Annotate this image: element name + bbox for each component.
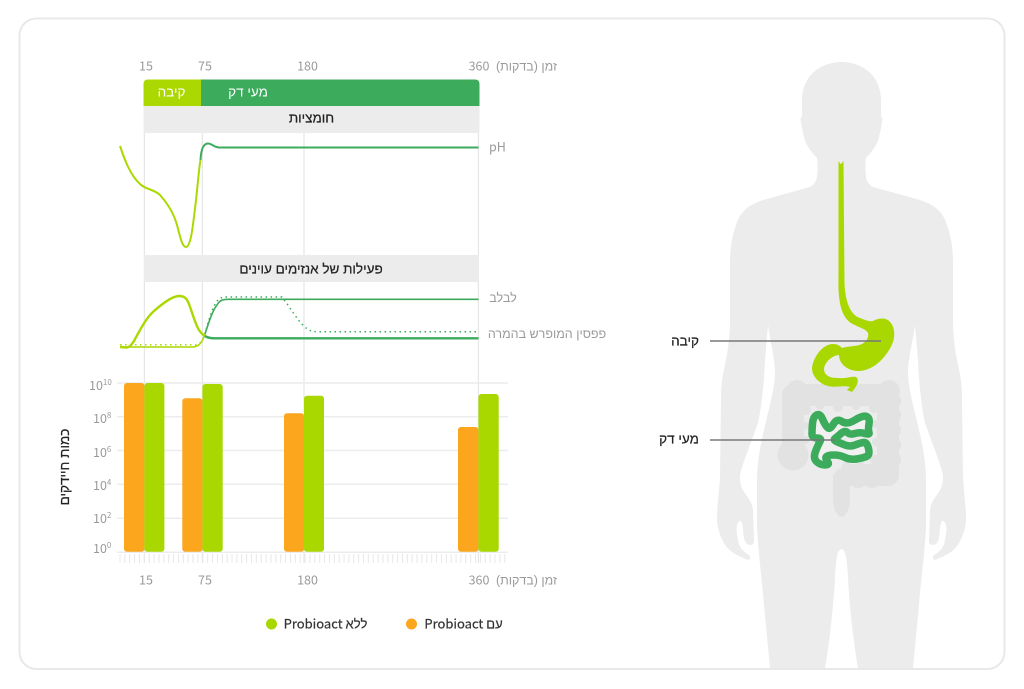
bottom time axis: 180	[297, 570, 318, 588]
callout: small intestine: מעי דק	[659, 432, 699, 446]
bottom time axis: 360	[469, 570, 489, 588]
heading: acidity: חומציות	[289, 110, 334, 126]
callout: stomach: קיבה	[671, 334, 699, 348]
bottom time axis: 75	[198, 570, 212, 588]
stage: small intestine	[201, 80, 480, 106]
top time axis: 360	[469, 56, 489, 74]
y axis labels: 10	[93, 538, 107, 557]
legend	[266, 614, 503, 632]
legend: without Probioact: ללא Probioact	[284, 614, 367, 632]
bottom time axis: 15	[139, 570, 153, 588]
stage: small intestine: מעי דק	[228, 84, 268, 100]
heading: enzyme activity: פעילות של אנזימים עוינים	[239, 262, 383, 276]
y axis labels: 2	[107, 510, 112, 521]
stage header	[144, 80, 480, 106]
pH line chart	[120, 136, 506, 247]
bottom time axis: זמן (בדקות)	[496, 574, 557, 588]
y axis labels: 10	[93, 442, 107, 461]
large intestine	[778, 380, 901, 517]
y axis title: כמות חיידקים	[57, 429, 72, 505]
y axis labels: 4	[107, 477, 112, 488]
x ticks	[120, 554, 508, 563]
top time axis: 180	[297, 56, 318, 74]
y axis labels: 8	[107, 410, 112, 421]
body illustration	[717, 62, 966, 668]
label: pancreas: לבלב	[489, 291, 517, 305]
bar chart	[57, 375, 508, 558]
bars: 15 min	[124, 383, 164, 552]
y axis labels	[89, 375, 112, 557]
y axis labels: 10	[93, 408, 107, 427]
small intestine	[812, 414, 869, 465]
y axis labels: 10	[93, 475, 107, 494]
silhouette	[717, 62, 966, 668]
y axis labels: 10	[89, 375, 103, 394]
y axis labels: 10	[103, 377, 112, 388]
top time axis: 15	[139, 56, 153, 74]
stage: stomach	[144, 80, 201, 106]
bottom time axis	[139, 570, 557, 588]
stomach and esophagus	[812, 161, 894, 392]
y axis labels: 0	[107, 540, 112, 551]
top time axis: זמן (בדקות)	[496, 60, 557, 74]
stage: stomach: קיבה	[158, 84, 185, 100]
label: pepsin: פפסין המופרש בהמרה	[488, 327, 606, 341]
y axis labels: 6	[107, 444, 112, 455]
heading: enzyme activity	[144, 255, 479, 282]
bars: 360 min	[458, 394, 499, 552]
top time axis: 75	[198, 56, 212, 74]
chart grid lines	[144, 133, 478, 563]
top time axis	[139, 56, 557, 74]
heading: acidity	[144, 106, 480, 133]
y axis labels: 10	[93, 508, 107, 527]
horizontal grid	[117, 383, 508, 552]
label: pH: pH	[489, 136, 506, 156]
bars: 180 min	[284, 396, 324, 552]
enzyme activity line chart	[120, 291, 606, 348]
bars: 75 min	[182, 384, 223, 552]
legend: with Probioact: עם Probioact	[424, 614, 503, 632]
